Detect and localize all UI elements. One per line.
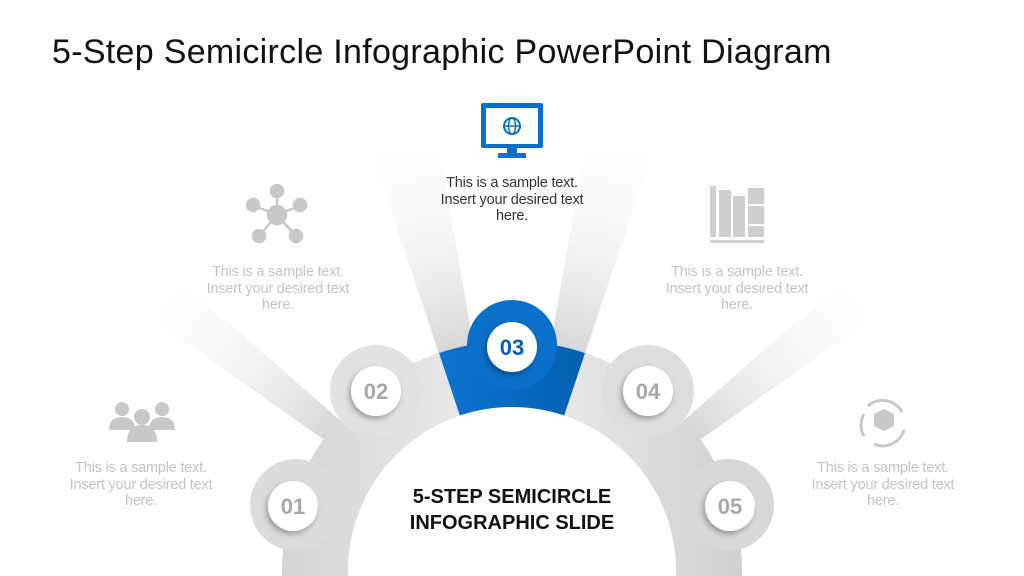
icon: people (109, 402, 175, 442)
badges: 04 (636, 379, 661, 404)
text 04 (666, 264, 808, 313)
text 03: This is a sample text. (446, 175, 578, 191)
text 03: here. (496, 208, 528, 224)
blue segment 03 (439, 300, 585, 416)
text 02: Insert your desired text (207, 280, 349, 296)
text 01: This is a sample text. (75, 460, 207, 476)
icon: books (710, 186, 764, 243)
semicircle ring (250, 300, 774, 576)
badges: 05 (718, 494, 742, 519)
text 03 (441, 175, 584, 224)
badges: 02 (364, 379, 388, 404)
center heading: 5-STEP SEMICIRCLE (413, 486, 611, 508)
text 04: Insert your desired text (666, 280, 808, 296)
center heading: INFOGRAPHIC SLIDE (410, 512, 614, 534)
text 05: Insert your desired text (812, 476, 954, 492)
text 01: here. (125, 493, 157, 509)
text 01: Insert your desired text (70, 476, 212, 492)
text 02: This is a sample text. (212, 264, 344, 280)
text 03: Insert your desired text (441, 192, 583, 208)
text 05: This is a sample text. (817, 460, 949, 476)
title: 5-Step Semicircle Infographic PowerPoint Diagram (52, 33, 832, 71)
badges: 01 (281, 494, 305, 519)
icon: network (247, 185, 306, 242)
text 02: here. (262, 297, 294, 313)
badges: 03 (500, 335, 524, 360)
text 04: here. (721, 297, 753, 313)
badges (268, 322, 755, 531)
rays (150, 150, 874, 571)
icon: monitor (481, 103, 543, 158)
inner white circle (348, 407, 676, 576)
center heading (410, 486, 614, 534)
text 05: here. (867, 493, 899, 509)
text 02 (207, 264, 350, 313)
text 04: This is a sample text. (671, 264, 803, 280)
icon: package cycle (861, 400, 904, 446)
text 05 (812, 460, 954, 509)
text 01 (70, 460, 212, 509)
